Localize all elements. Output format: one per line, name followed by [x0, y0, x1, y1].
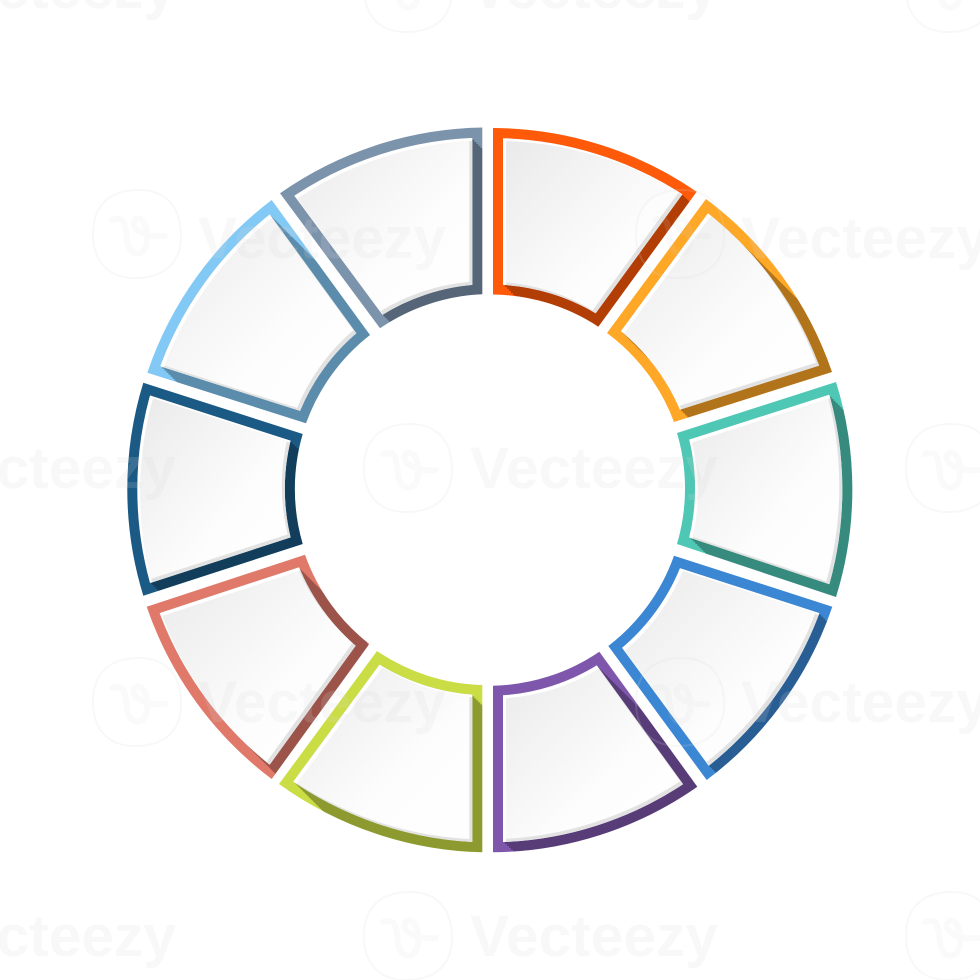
segment 1: orange: [493, 128, 697, 327]
segment 8: navy: [127, 382, 303, 596]
segment 3: teal: [677, 382, 852, 597]
segment 2: amber: [607, 199, 832, 422]
segment 9: sky blue: [147, 200, 370, 424]
segment 5: purple: [493, 652, 698, 852]
segment 4: blue: [608, 556, 832, 780]
segment 10: slate grey: [280, 128, 482, 328]
segment 6: lime: [279, 651, 482, 852]
segment 7: salmon: [146, 554, 370, 779]
